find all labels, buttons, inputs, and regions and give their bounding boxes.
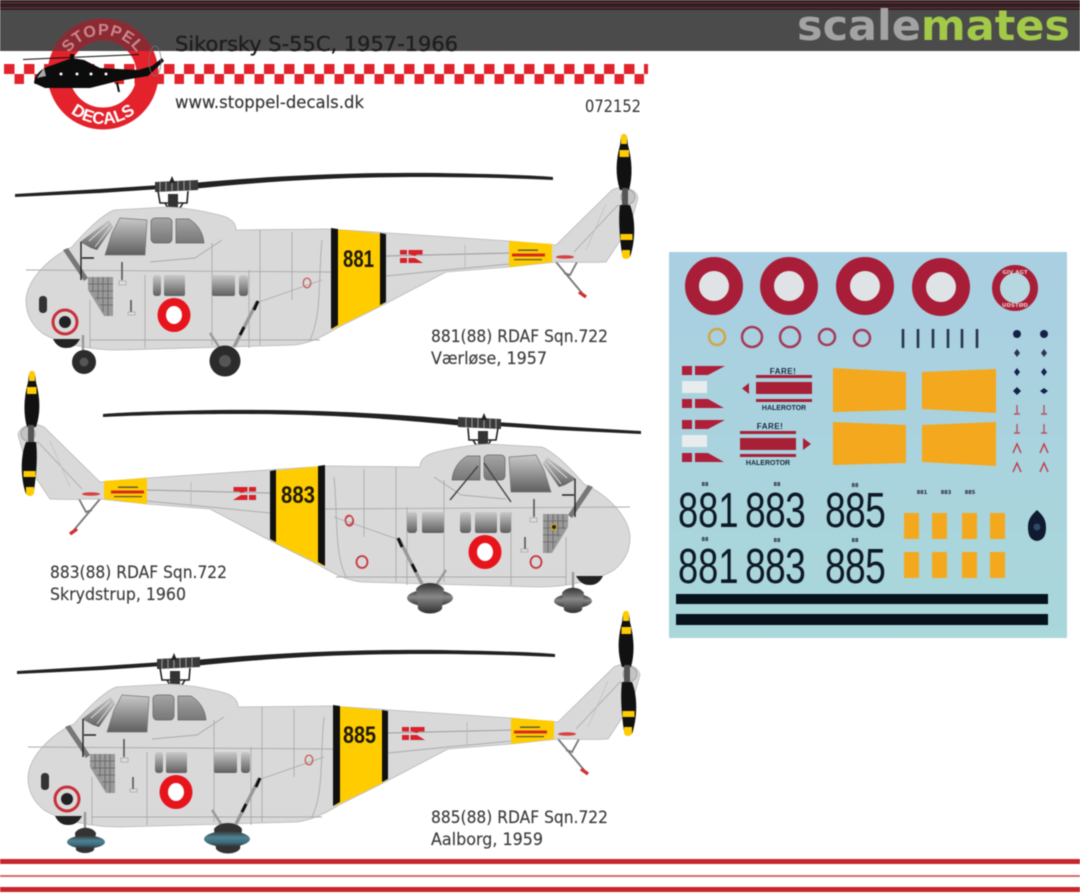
helicopter 883 bbox=[18, 371, 641, 614]
small 88 marks: 883 bbox=[941, 490, 952, 496]
small 88 marks: 885 bbox=[965, 490, 976, 496]
decal sheet bbox=[669, 252, 1067, 638]
black ticks bbox=[903, 329, 977, 348]
small 88 marks bbox=[702, 482, 976, 544]
large serials: 885 bbox=[825, 540, 886, 594]
caption 881 bbox=[431, 327, 608, 369]
nose crest bbox=[39, 296, 47, 313]
caption 885: 885(88) RDAF Sqn.722 bbox=[431, 808, 608, 828]
logo: Stoppel Decals: STOPPEL bbox=[62, 23, 141, 52]
warning decal 1: FARE! bbox=[770, 367, 796, 376]
small 88 marks: 881 bbox=[917, 490, 928, 496]
black stripes bbox=[676, 594, 1048, 604]
warning ring bbox=[996, 269, 1034, 309]
vent dot bbox=[550, 524, 558, 530]
warning decal 2 bbox=[740, 422, 811, 467]
header band bbox=[0, 0, 1080, 51]
main float bbox=[204, 823, 250, 854]
large serials: 881 bbox=[678, 484, 738, 538]
scalemates wordmark: scalemates bbox=[797, 1, 1070, 50]
logo: Stoppel Decals: DECALS bbox=[70, 103, 134, 126]
helicopter 881 bbox=[15, 134, 638, 376]
small 88 marks: 88 bbox=[774, 482, 781, 488]
warning decal 2: HALEROTOR bbox=[746, 460, 790, 467]
logo: Stoppel Decals bbox=[22, 18, 164, 130]
large serials: 885 bbox=[825, 484, 886, 538]
small 88 marks: 88 bbox=[702, 537, 709, 543]
nose roundel bbox=[55, 787, 79, 811]
serial 885: 885 bbox=[343, 722, 376, 749]
window struts bbox=[450, 463, 511, 502]
helicopter 885 bbox=[17, 611, 640, 854]
warning ring: UDSTØD bbox=[1002, 302, 1028, 309]
large serials: 881 bbox=[678, 540, 738, 594]
small 88 marks: 88 bbox=[702, 482, 709, 488]
warning ring: GIV AGT bbox=[1002, 270, 1028, 276]
warning decal 1: HALEROTOR bbox=[762, 405, 806, 412]
red rings bbox=[346, 516, 542, 568]
orange panels bbox=[833, 368, 996, 466]
large serials bbox=[678, 484, 886, 594]
orange small rectangles bbox=[904, 513, 1005, 578]
large roundels bbox=[692, 264, 963, 309]
caption 885: Aalborg, 1959 bbox=[431, 830, 543, 850]
caption 883: Skrydstrup, 1960 bbox=[50, 585, 186, 605]
checkered strip bbox=[4, 64, 648, 84]
logo helicopter silhouette bbox=[23, 54, 164, 92]
large serials: 883 bbox=[745, 484, 806, 538]
small rings bbox=[709, 327, 870, 347]
tiny insignia bbox=[1013, 330, 1048, 472]
small 88 marks: 88 bbox=[852, 538, 859, 544]
serial 881: 881 bbox=[343, 246, 374, 273]
nose fairing bbox=[53, 339, 80, 348]
side windows bbox=[407, 512, 511, 533]
nose float bbox=[67, 828, 105, 853]
flags bbox=[682, 366, 725, 462]
serial 883: 883 bbox=[281, 482, 315, 509]
warning decal 1 bbox=[742, 367, 812, 412]
title: Sikorsky S-55C, 1957-1966 bbox=[175, 32, 458, 56]
nose fairing bbox=[55, 816, 82, 825]
caption 885 bbox=[431, 808, 608, 850]
small 88 marks: 88 bbox=[774, 538, 781, 544]
website: www.stoppel-decals.dk bbox=[175, 93, 364, 113]
kit number: 072152 bbox=[585, 97, 641, 117]
caption 883 bbox=[50, 563, 227, 605]
caption 881: Værløse, 1957 bbox=[431, 349, 547, 369]
main wheel bbox=[210, 346, 240, 376]
warning decal 2: FARE! bbox=[757, 422, 783, 431]
nose roundel bbox=[53, 310, 77, 334]
bottom red lines bbox=[0, 859, 1080, 892]
caption 881: 881(88) RDAF Sqn.722 bbox=[431, 327, 608, 347]
main float bbox=[407, 583, 453, 614]
small 88 marks: 88 bbox=[852, 483, 859, 489]
cabin side windows and roundel bbox=[153, 275, 248, 332]
cabin side windows and roundel bbox=[155, 752, 250, 809]
caption 883: 883(88) RDAF Sqn.722 bbox=[50, 563, 227, 583]
nose float bbox=[554, 588, 592, 613]
front wheel bbox=[72, 350, 96, 374]
fuselage roundel bbox=[468, 535, 502, 569]
crest bbox=[1028, 510, 1046, 541]
nose crest bbox=[41, 773, 49, 790]
nose fairing bbox=[576, 576, 603, 585]
large serials: 883 bbox=[745, 540, 806, 594]
